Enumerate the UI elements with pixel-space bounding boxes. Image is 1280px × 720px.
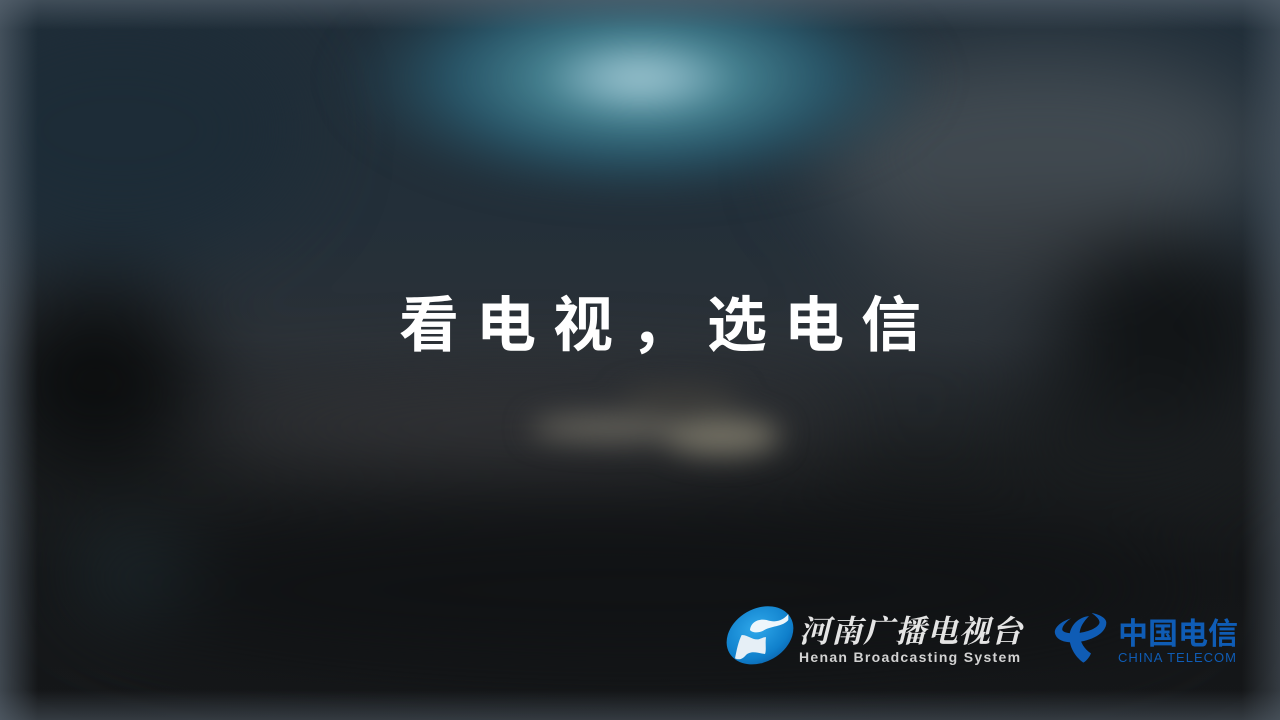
glow: overhead light [330,0,950,206]
logo wordmark English: Henan Broadcasting System [799,649,1021,665]
logo wordmark English: CHINA TELECOM [1118,650,1237,665]
logo: Henan Broadcasting System [726,606,1024,665]
logo wordmark Chinese: 河南广播电视台 [799,606,1023,651]
logo wordmark Chinese: 中国电信 [1118,609,1238,653]
icon: China Telecom emblem [1054,613,1106,663]
title: 看电视，选电信 [399,277,938,364]
logo: China Telecom [1054,609,1238,665]
icon: Henan Broadcasting emblem [726,606,794,664]
